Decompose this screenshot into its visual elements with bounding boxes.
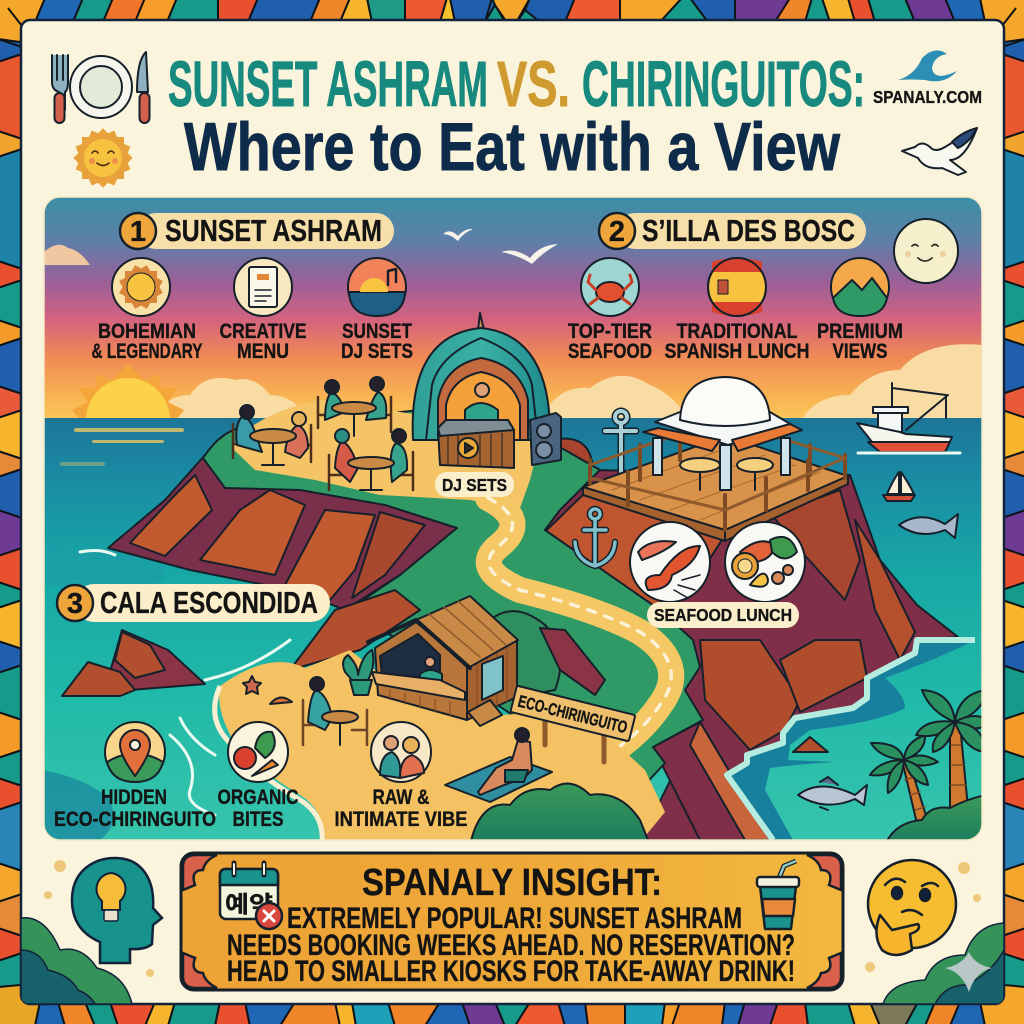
anchor in the sea [605,411,636,472]
icon: fork, plate and knife [52,52,150,123]
far headland rock [562,438,594,463]
section 2 heading: 2 [609,216,625,248]
label: dj sets: DJ SETS [442,475,507,495]
icon: crab badge [581,258,639,316]
section 3 heading [57,584,330,622]
icon: mountain views badge [831,258,889,316]
sparkle watermark [945,952,992,992]
section 2 heading: S’ILLA DES BOSC [642,213,855,248]
icon: moon [894,219,958,283]
feature labels: cala escondida [54,786,468,831]
corner bushes [21,918,1004,1004]
starfish and shell [243,676,292,704]
left cliffs [108,455,457,610]
plate: lobster [630,522,710,602]
bush: left [21,918,132,1004]
heading: SPANALY INSIGHT: [362,862,662,904]
feature labels: cala escondida: ORGANIC [218,786,298,809]
icon: smiling sun [73,128,133,188]
anchor on the cliff [575,509,615,566]
clouds [44,245,982,422]
panel: illustrated map [44,197,992,845]
section 1 heading: 1 [130,216,146,248]
beach [219,650,665,845]
title line 1: SUNSET ASHRAM [168,48,488,120]
icon: seagull [902,128,977,175]
table 3 [329,429,413,490]
speaker [530,413,561,465]
callout: spanaly insight [181,853,843,990]
title [168,48,865,185]
title line 2: Where to Eat with a View [184,109,841,185]
feature labels: s'illa des bosc: PREMIUM [817,320,903,343]
logo: spanaly [873,50,982,107]
deck [583,430,848,541]
table 1 [233,405,311,465]
sunbather on towel [445,728,552,802]
feature labels: sunset ashram: DJ SETS [341,340,413,363]
bush under palms [885,795,985,845]
icon: head with light bulb [72,858,162,963]
body text [227,902,795,988]
cafe tables with diners [233,377,413,490]
icon: reservation calendar: 예약 [225,885,273,919]
icon: setting sun [72,364,184,418]
beach diner [303,677,367,745]
icon: fishing boat [857,383,960,453]
icon: spanish flag badge [708,258,766,316]
cliff-top restaurant with white dome [583,377,848,541]
dome and dj booth [413,313,561,468]
bush at bottom of beach [470,784,650,845]
logo: spanaly: SPANALY.COM [873,87,982,107]
feature labels: cala escondida: HIDDEN [101,786,167,809]
bush: right [883,923,1004,1004]
body text: HEAD TO SMALLER KIOSKS FOR TAKE-AWAY DRINK! [227,955,795,988]
rock and bush behind beach hut [290,590,605,700]
feature labels: cala escondida: ECO-CHIRINGUITO [54,808,216,831]
sign: eco-chiringuito [510,686,635,762]
section 3 heading: 3 [67,588,83,620]
small rock island [62,630,205,696]
plate: seafood salad [725,522,805,602]
plant [343,650,373,695]
body text: EXTREMELY POPULAR! SUNSET ASHRAM [287,902,742,935]
feature labels: s'illa des bosc: SPANISH LUNCH [664,340,810,363]
gazebo [643,377,802,490]
dome [413,313,550,440]
beach hut [343,596,518,726]
sea details [60,428,184,466]
sign: eco-chiringuito: ECO-CHIRINGUITO [516,692,629,737]
label: seafood lunch: SEAFOOD LUNCH [654,605,792,625]
red corners [183,855,841,988]
icon: take-away cup [757,861,799,929]
icon: reservation calendar [220,863,282,929]
green land and sand plateau [203,400,703,790]
feature labels: sunset ashram: & LEGENDARY [92,340,202,363]
icon: sailboat [883,472,915,501]
feature labels: s'illa des bosc: VIEWS [832,340,888,363]
feature labels: s'illa des bosc: SEAFOOD [568,340,652,363]
map outline [44,197,982,840]
icon: sunset dj badge [348,258,406,316]
small rock [793,737,828,752]
feature labels: cala escondida: RAW & [372,786,430,809]
feature labels: cala escondida: INTIMATE VIBE [334,808,468,831]
sea [44,418,982,840]
icon: organic produce badge [228,722,288,782]
feature labels: s'illa des bosc [568,320,903,363]
icon: intimate vibe badge [371,722,431,782]
icon: palm trees [870,690,992,828]
feature labels: sunset ashram: BOHEMIAN [98,320,196,343]
feature labels: cala escondida: BITES [232,808,284,831]
table 2 [318,377,391,436]
feature labels: s'illa des bosc: TOP-TIER [568,320,652,343]
feature labels: sunset ashram: SUNSET [342,320,412,343]
feature labels: sunset ashram [92,320,413,363]
seafood plates [630,522,805,602]
shore water band [727,640,975,840]
feature labels: sunset ashram: MENU [237,340,289,363]
sky [44,197,982,422]
decorative dots [44,860,981,977]
icon: sun badge [112,258,170,316]
birds in the sky [443,229,558,264]
icon: map pin badge [105,722,165,782]
title line 1: VS. [497,48,570,120]
winding path [488,498,671,760]
body text: NEEDS BOOKING WEEKS AHEAD. NO RESERVATION? [227,929,795,962]
icon: fish near sailboat [899,514,958,538]
big right cliff [520,470,958,842]
section 1 heading: SUNSET ASHRAM [165,213,382,248]
dj booth [438,420,514,468]
feature labels: sunset ashram: CREATIVE [220,320,306,343]
section 3 heading: CALA ESCONDIDA [100,585,318,620]
icon: thinking face [868,860,956,955]
icon: menu badge [234,258,292,316]
feature labels: s'illa des bosc: TRADITIONAL [676,320,798,343]
icon: fish near shore [798,777,867,810]
